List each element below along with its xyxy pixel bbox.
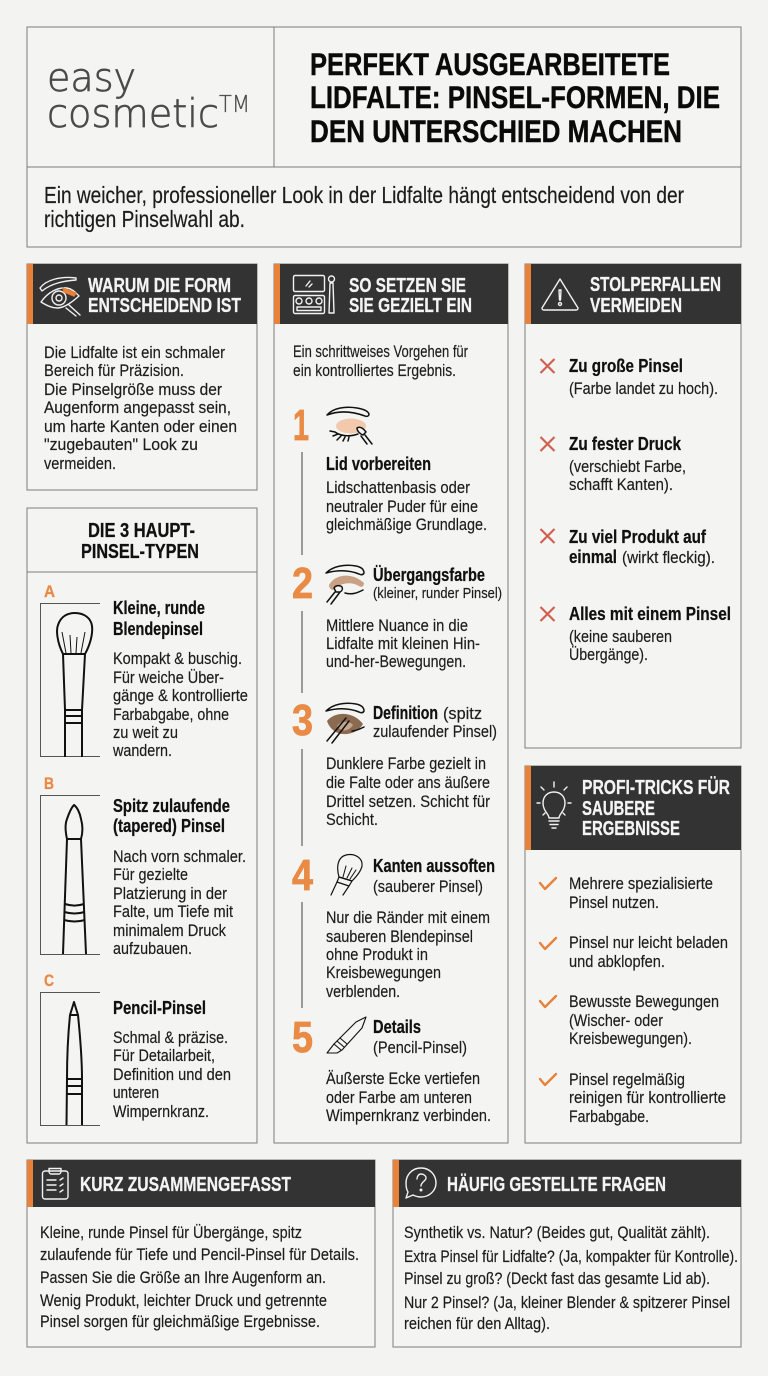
- step 1 text: Lid vorbereiten: [326, 454, 431, 474]
- step 2: [292, 559, 502, 693]
- faq text: reichen für den Alltag).: [404, 1314, 550, 1333]
- step 2 text: und-her-Bewegungen.: [326, 652, 466, 671]
- step 3: 3: [292, 696, 313, 745]
- tip 3: (Wischer- oder: [569, 1011, 663, 1030]
- text block: vermeiden.: [44, 454, 116, 473]
- step 4: [292, 851, 495, 1008]
- pitfall 2: (verschiebt Farbe,: [569, 457, 686, 476]
- step 2 text: (kleiner, runder Pinsel): [373, 585, 502, 602]
- pitfall 1: Zu große Pinsel: [569, 356, 683, 376]
- brush text C: Für Detailarbeit,: [113, 1046, 215, 1065]
- intro text: Ein schrittweises Vorgehen für: [293, 342, 468, 361]
- pitfall 3: (wirkt fleckig).: [622, 548, 715, 567]
- heading: ERGEBNISSE: [582, 817, 680, 840]
- heading: STOLPERFALLEN: [590, 273, 721, 296]
- heading: SO SETZEN SIE: [349, 274, 466, 297]
- brush text B: aufzubauen.: [113, 939, 192, 958]
- step 1 text: neutraler Puder für eine: [326, 497, 478, 516]
- icon: round blending brush: [57, 613, 92, 757]
- icon: eye with transition colour: [326, 565, 364, 604]
- step 5 text: oder Farbe am unteren: [326, 1088, 472, 1107]
- logo: cosmetic: [47, 92, 219, 137]
- pitfall 1: [540, 356, 718, 398]
- tip 1: Pinsel nutzen.: [569, 893, 659, 912]
- step 4 text: Kanten aussoften: [373, 856, 495, 876]
- intro text: richtigen Pinselwahl ab.: [44, 206, 245, 232]
- icon: makeup palette: [294, 276, 334, 314]
- step 1: 1: [293, 401, 309, 450]
- step 1 text: [326, 454, 487, 534]
- panel: profi-tricks: [525, 766, 741, 1143]
- faq text: Synthetik vs. Natur? (Beides gut, Qualität zählt).: [404, 1223, 710, 1242]
- pitfall 3: [540, 527, 715, 567]
- title: DEN UNTERSCHIED MACHEN: [310, 113, 682, 149]
- panel: häufig gestellte fragen: [393, 1160, 741, 1347]
- heading: [88, 274, 241, 317]
- tip 3: Kreisbewegungen).: [569, 1029, 692, 1048]
- brush text A: Für weiche Über-: [113, 668, 224, 687]
- step 3: [292, 696, 497, 846]
- step 3 text: Schicht.: [326, 810, 378, 829]
- panel: warum die form entscheidend ist: [27, 264, 257, 490]
- step 4 text: Nur die Ränder mit einem: [326, 908, 490, 927]
- step 2 text: Übergangsfarbe: [373, 565, 485, 585]
- tip 2: Pinsel nur leicht beladen: [569, 933, 728, 952]
- text block: Die Lidfalte ist ein schmaler: [44, 343, 225, 362]
- brush text B: Falte, um Tiefe mit: [113, 902, 233, 921]
- brush text B: minimalem Druck: [113, 921, 226, 940]
- pitfall 2: schafft Kanten).: [569, 475, 673, 494]
- brush text A: Farbabgabe, ohne: [113, 705, 229, 724]
- title: PERFEKT AUSGEARBEITETE: [310, 46, 670, 82]
- tip 2: und abklopfen.: [569, 952, 665, 971]
- brush text B: (tapered) Pinsel: [113, 816, 225, 836]
- step 1: [293, 401, 487, 555]
- icon: eye with dark colour: [326, 703, 364, 743]
- summary text: Kleine, runde Pinsel für Übergänge, spitz: [40, 1223, 302, 1242]
- tip 4: Pinsel regelmäßig: [569, 1070, 685, 1089]
- heading: SAUBERE: [582, 797, 655, 820]
- step 4 text: verblenden.: [326, 982, 400, 1001]
- icon: eye with base: [327, 407, 372, 444]
- step 5: 5: [292, 1013, 313, 1062]
- step 5 text: (Pencil-Pinsel): [373, 1038, 467, 1057]
- pitfall 2: [540, 434, 686, 494]
- panel: so setzen sie sie gezielt ein: [274, 264, 508, 1143]
- heading: DIE 3 HAUPT-: [88, 519, 195, 542]
- title: [310, 46, 720, 149]
- step 3 text: Dunklere Farbe gezielt in: [326, 754, 486, 773]
- tip 2: [540, 933, 728, 971]
- brush text C: Definition und den: [113, 1065, 231, 1084]
- summary text: zulaufende für Tiefe und Pencil-Pinsel für Details.: [40, 1245, 359, 1264]
- step 2 text: [326, 565, 502, 671]
- brush type A: A: [44, 582, 55, 601]
- pitfall 2: Zu fester Druck: [569, 434, 682, 454]
- step 4 text: sauberen Blendepinsel: [326, 927, 473, 946]
- pitfall 1: (Farbe landet zu hoch).: [569, 379, 718, 398]
- brush type B: [40, 774, 246, 958]
- step 5 text: Details: [373, 1017, 421, 1037]
- icon: tapered brush: [63, 805, 86, 954]
- brush text C: Schmal & präzise.: [113, 1028, 228, 1047]
- step 2: 2: [292, 559, 313, 608]
- tip 1: [540, 874, 713, 912]
- text block: um harte Kanten oder einen: [44, 417, 237, 436]
- step 3 text: [326, 703, 497, 829]
- text block: Die Pinselgröße muss der: [44, 380, 222, 399]
- text block: Augenform angepasst sein,: [44, 398, 231, 417]
- faq text: Pinsel zu groß? (Deckt fast das gesamte Lid ab).: [404, 1269, 710, 1288]
- step 5: [292, 1013, 491, 1125]
- heading: HÄUFIG GESTELLTE FRAGEN: [447, 1173, 666, 1196]
- brush type C: [40, 971, 231, 1126]
- panel: kurz zusammengefasst: [27, 1160, 375, 1347]
- brush text A: wandern.: [112, 741, 172, 760]
- brush type A: [40, 582, 248, 760]
- brush text C: unteren: [113, 1083, 159, 1102]
- step 3 text: Drittel setzen. Schicht für: [326, 792, 490, 811]
- tip 4: [540, 1070, 726, 1126]
- step 1 text: gleichmäßige Grundlage.: [326, 515, 487, 534]
- brush text C: Pencil-Pinsel: [113, 998, 206, 1018]
- tip 4: reinigen für kontrollierte: [569, 1088, 726, 1107]
- heading: [81, 519, 199, 563]
- heading: VERMEIDEN: [590, 294, 682, 317]
- faq text: [404, 1223, 738, 1333]
- text block: Bereich für Präzision.: [44, 361, 184, 380]
- step 5 text: [326, 1017, 491, 1125]
- brush text A: zu weit zu: [113, 723, 178, 742]
- summary text: Pinsel sorgen für gleichmäßige Ergebnisse.: [40, 1312, 320, 1331]
- step 3 text: (spitz: [443, 704, 482, 723]
- pitfall 4: (keine sauberen: [569, 627, 672, 646]
- summary text: Passen Sie die Größe an Ihre Augenform an.: [40, 1268, 326, 1287]
- intro text: [293, 342, 468, 380]
- brush text B: Spitz zulaufende: [113, 796, 230, 816]
- tip 4: Farbabgabe.: [569, 1107, 649, 1126]
- tip 3: [540, 992, 719, 1048]
- brush text B: Platzierung in der: [113, 884, 227, 903]
- icon: question bubble: [406, 1168, 436, 1198]
- heading: PINSEL-TYPEN: [81, 540, 199, 563]
- heading: WARUM DIE FORM: [88, 274, 231, 297]
- step 3 text: die Falte oder ans äußere: [326, 773, 490, 792]
- icon: clipboard: [42, 1168, 68, 1199]
- icon: light bulb: [537, 782, 571, 828]
- pitfall 3: einmal: [569, 547, 617, 567]
- intro text: [44, 182, 684, 232]
- step 4 text: [326, 856, 495, 1001]
- brush text A: Blendepinsel: [113, 619, 203, 639]
- pitfall 4: [540, 604, 731, 664]
- pitfall 4: Alles mit einem Pinsel: [569, 604, 731, 624]
- text block: [44, 343, 237, 473]
- logo: easy: [47, 56, 136, 101]
- tip 1: Mehrere spezialisierte: [569, 874, 713, 893]
- panel: die 3 haupt-pinsel-typen: [27, 508, 257, 1143]
- logo: TM: [219, 92, 250, 118]
- step 4 text: (sauberer Pinsel): [373, 877, 483, 896]
- pitfall 4: Übergänge).: [569, 645, 648, 664]
- brush type B: B: [44, 774, 54, 793]
- step 3 text: Definition: [373, 703, 438, 723]
- brush text B: Für gezielte: [113, 865, 188, 884]
- panel: stolperfallen vermeiden: [525, 264, 741, 748]
- logo: [47, 56, 250, 137]
- step 4: 4: [292, 851, 313, 900]
- brush text A: [112, 598, 248, 760]
- brush text C: [113, 998, 231, 1121]
- step 2 text: Mittlere Nuance in die: [326, 616, 468, 635]
- brush text B: [113, 796, 246, 958]
- step 5 text: Wimpernkranz verbinden.: [326, 1106, 491, 1125]
- step 1 text: Lidschattenbasis oder: [326, 478, 470, 497]
- summary text: [40, 1223, 359, 1331]
- icon: pencil brush: [327, 1017, 366, 1053]
- heading: ENTSCHEIDEND IST: [88, 294, 241, 317]
- text block: "zugebauten" Look zu: [44, 435, 198, 454]
- tip 3: Bewusste Bewegungen: [569, 992, 719, 1011]
- step 2 text: Lidfalte mit kleinen Hin-: [326, 634, 480, 653]
- heading: [349, 274, 472, 317]
- step 3 text: zulaufender Pinsel): [373, 722, 497, 741]
- summary text: Wenig Produkt, leichter Druck und getrennte: [40, 1291, 327, 1310]
- icon: pencil brush: [66, 1002, 82, 1125]
- heading: [590, 273, 721, 317]
- brush text A: Kompakt & buschig.: [113, 649, 242, 668]
- icon: blending brush: [331, 855, 362, 895]
- icon: eye with brush: [40, 277, 80, 316]
- pitfall 3: Zu viel Produkt auf: [569, 527, 707, 547]
- header panel: [27, 27, 741, 247]
- brush text A: gänge & kontrollierte: [113, 686, 248, 705]
- brush type C: C: [44, 971, 54, 990]
- brush text B: Nach vorn schmaler.: [113, 847, 246, 866]
- step 5 text: Äußerste Ecke vertiefen: [326, 1069, 480, 1088]
- step 4 text: ohne Produkt in: [326, 945, 428, 964]
- brush text A: Kleine, runde: [113, 598, 205, 618]
- heading: KURZ ZUSAMMENGEFASST: [80, 1173, 291, 1196]
- brush text C: Wimpernkranz.: [113, 1102, 209, 1121]
- intro text: ein kontrolliertes Ergebnis.: [293, 361, 456, 380]
- step 4 text: Kreisbewegungen: [326, 963, 441, 982]
- heading: SIE GEZIELT EIN: [349, 294, 472, 317]
- icon: warning triangle: [542, 279, 578, 310]
- heading: [582, 776, 730, 840]
